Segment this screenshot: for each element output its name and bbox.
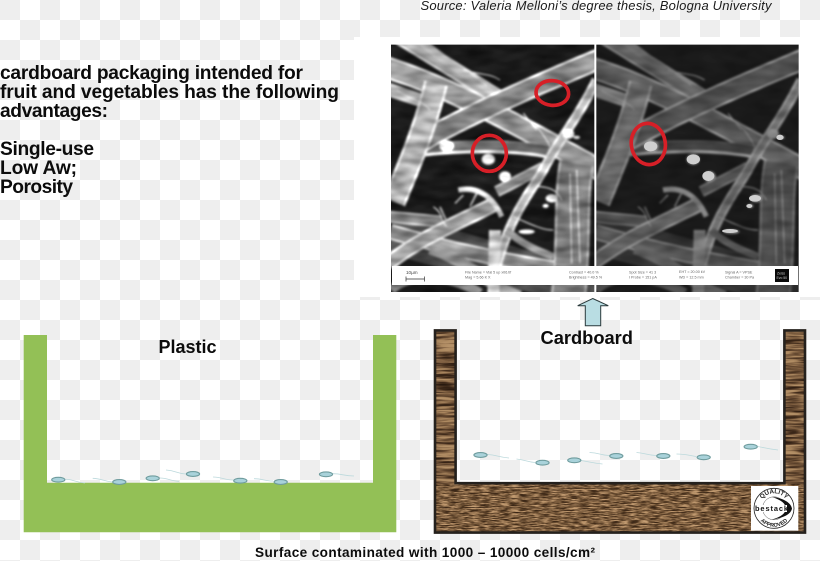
bacteria in cardboard tray [474,444,778,465]
micrograph data bar: Spot Size = 41 3 [629,270,656,274]
cardboard right wall [784,330,806,484]
micrograph data bar: File Name = Vial 5 up x06.tif [465,270,512,274]
intro text block: Low Aw; [0,158,77,179]
micrograph data bar: Evo 50 [776,276,787,280]
bacteria on plastic surface [52,470,354,484]
micrograph data bar: Zeiss [777,272,785,276]
caption: surface contamination: Surface contaminated with 1000 – 10000 cells/cm² [255,545,595,560]
micrograph data bar: Brightness = 49.5 % [569,276,603,280]
quality stamp: QUALITY [760,489,789,498]
arrow: from cardboard up to micrograph [578,298,608,326]
panel: cardboard tray [434,329,806,534]
quality stamp: bestack [755,504,789,513]
white panel behind micrograph [354,37,820,297]
micrograph data bar [392,266,798,285]
intro text block: Porosity [0,177,73,198]
intro text block [0,63,339,198]
micrograph: right dark view [596,44,799,292]
micrograph: left bright view [391,44,594,292]
micrograph data bar: Mag = 5.66 K X [465,276,491,280]
intro text block: advantages: [0,101,108,122]
micrograph data bar: Chamber = 30 Pa [725,276,755,280]
heading: plastic: Plastic [158,337,217,357]
quality stamp: APPROVED [760,519,787,527]
intro text block: cardboard packaging intended for [0,63,304,84]
micrograph data bar: WD = 12.5 mm [679,276,704,280]
micrograph data bar: EHT = 20.00 kV [679,270,706,274]
intro text block: Single-use [0,139,94,160]
panel: electron micrographs of cardboard fibres [391,44,799,292]
cardboard base [434,484,806,533]
panel: plastic tray [24,335,396,532]
quality stamp [751,486,798,531]
heading: cardboard: Cardboard [540,327,633,348]
micrograph data bar: Contrast = 40.0 % [569,270,599,274]
micrograph data bar: 10µm [406,270,418,275]
cardboard left wall [434,330,456,484]
intro text block: fruit and vegetables has the following [0,82,339,103]
micrograph data bar: Signal A = VPSE [725,270,753,274]
micrograph data bar: I Probe = 151 pA [629,276,657,280]
